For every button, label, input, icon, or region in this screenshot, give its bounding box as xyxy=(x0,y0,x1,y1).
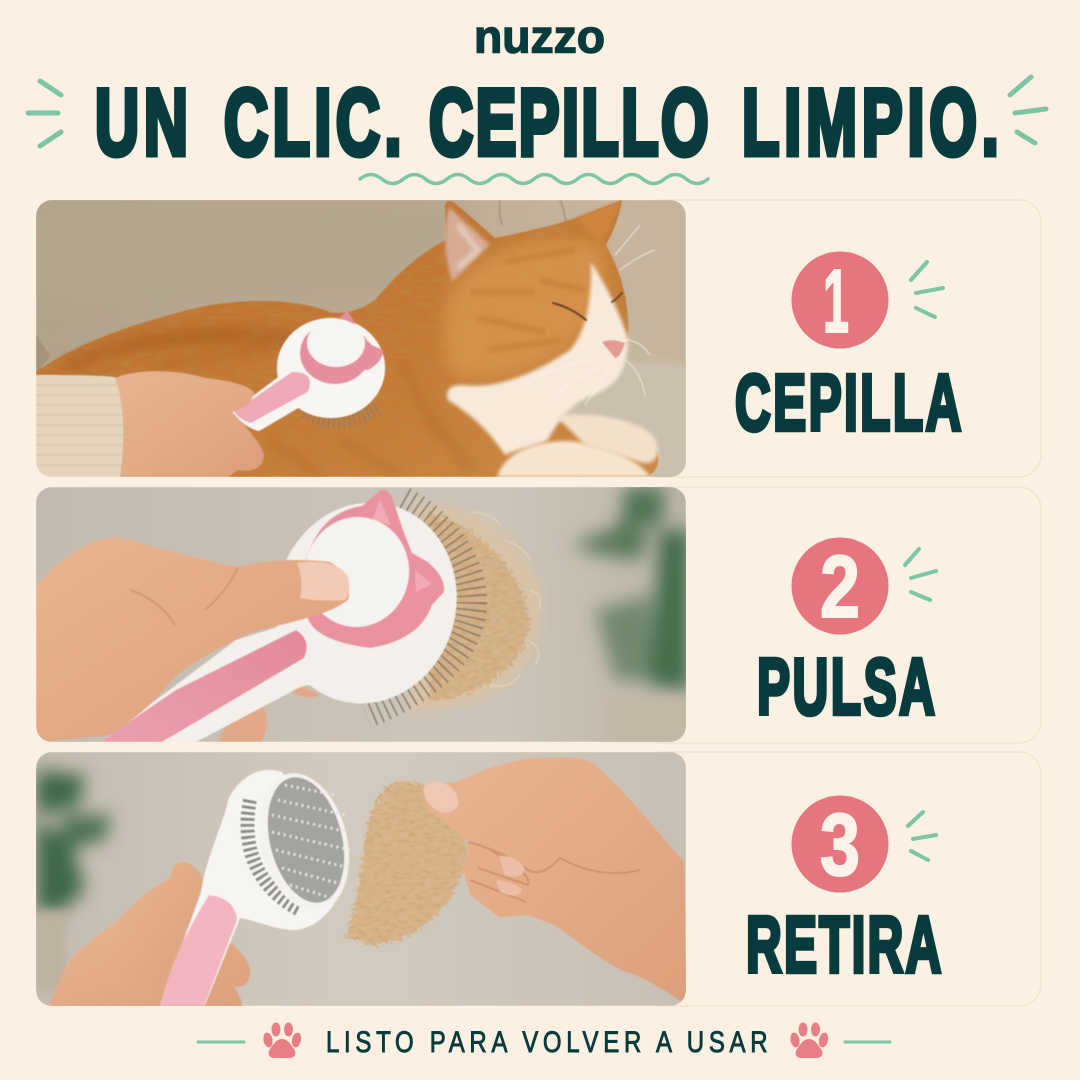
sparks 2 xyxy=(905,549,936,600)
fingers behind handle xyxy=(218,687,320,742)
card: step 3 xyxy=(640,752,1041,1006)
sparks 3 xyxy=(908,812,936,860)
left thumb xyxy=(120,862,203,933)
photo 1: cat being brushed xyxy=(36,200,686,477)
icon: paw right xyxy=(789,1022,829,1058)
sparks 1 xyxy=(911,262,943,317)
hand 1 xyxy=(115,371,264,477)
footer text: LISTO PARA VOLVER A USAR xyxy=(326,1024,768,1059)
cat white chest and muzzle xyxy=(447,262,628,455)
number badge 2: 2 xyxy=(820,537,860,636)
footer line left xyxy=(198,1040,244,1044)
cat nose and eyes xyxy=(602,340,625,358)
title sparks right xyxy=(1010,77,1046,143)
cat paws xyxy=(497,441,650,477)
photo 3: removing hair xyxy=(36,752,687,1007)
title: UN xyxy=(95,69,188,175)
number badge 3: 3 xyxy=(820,795,860,894)
cat right ear xyxy=(576,201,621,243)
number badge 1 xyxy=(792,252,888,352)
title: CLIC. xyxy=(224,69,401,175)
brush head xyxy=(100,483,478,742)
cat left ear xyxy=(445,207,490,282)
whiskers xyxy=(584,224,656,406)
shed hair clump xyxy=(345,781,468,945)
icon: paw left xyxy=(262,1022,302,1058)
brand logo: nuzzo xyxy=(474,10,605,62)
label retira: RETIRA xyxy=(746,901,941,990)
left hand fingers xyxy=(49,918,250,1007)
cat xyxy=(36,200,658,477)
title: CEPILLO xyxy=(429,69,709,175)
number badge 3 xyxy=(792,795,888,894)
card: step 2 xyxy=(640,487,1041,743)
plant blurred left xyxy=(36,770,112,912)
label pulsa: PULSA xyxy=(757,643,935,732)
title sparks left xyxy=(28,81,61,146)
title xyxy=(95,69,999,175)
title: LIMPIO. xyxy=(742,69,999,175)
wavy underline xyxy=(360,174,708,184)
shed hair xyxy=(410,505,542,712)
hand 2 xyxy=(36,537,350,742)
photo 2: thumb pressing button xyxy=(36,483,690,742)
brush open xyxy=(160,764,363,1006)
brush 1 xyxy=(232,311,385,431)
number badge 2 xyxy=(792,537,888,636)
number badge 1: 1 xyxy=(823,252,849,352)
right hand xyxy=(423,757,687,1006)
plant blurred xyxy=(572,487,690,690)
footer line right xyxy=(845,1040,890,1044)
label cepilla: CEPILLA xyxy=(735,359,961,448)
bristles xyxy=(365,503,470,712)
sleeve xyxy=(36,375,124,477)
card: step 1 xyxy=(640,200,1041,477)
